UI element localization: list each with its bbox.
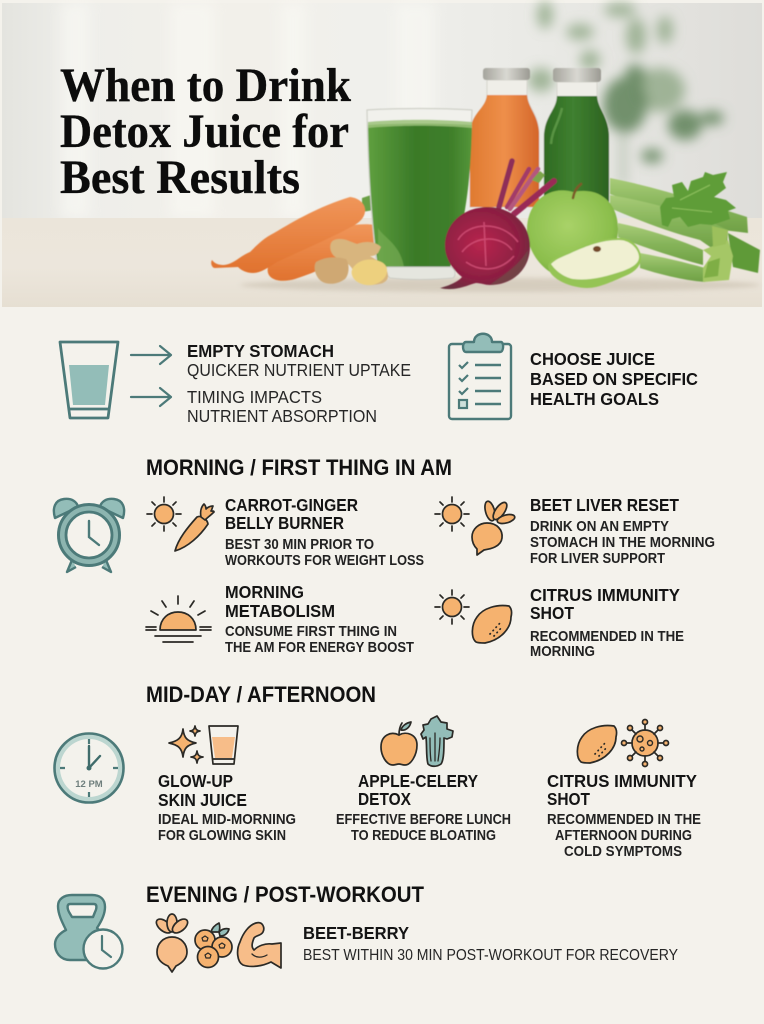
hero title: Best Results — [60, 151, 300, 204]
heading: mid-day: MID-DAY / AFTERNOON — [146, 682, 376, 707]
text: citrus immunity morning: RECOMMENDED IN THE — [530, 629, 684, 645]
text: citrus immunity afternoon: COLD SYMPTOMS — [564, 844, 682, 860]
text: beet liver reset: DRINK ON AN EMPTY — [530, 519, 669, 535]
text: apple-celery detox: TO REDUCE BLOATING — [351, 828, 496, 844]
text: glow-up: SKIN JUICE — [158, 790, 247, 810]
beet stems — [499, 161, 554, 214]
arrow: empty stomach — [131, 346, 171, 364]
text: carrot-ginger: BELLY BURNER — [225, 513, 344, 533]
text: apple-celery detox: DETOX — [358, 789, 411, 809]
text: apple-celery detox: EFFECTIVE BEFORE LUNCH — [336, 812, 511, 828]
goal text — [530, 349, 698, 409]
icon: sun and lemon — [435, 590, 512, 643]
text: apple-celery detox: APPLE-CELERY — [358, 771, 478, 791]
hero title: Detox Juice for — [60, 105, 349, 158]
goal text: BASED ON SPECIFIC — [530, 369, 698, 389]
celery bunch — [610, 172, 760, 282]
glass icon — [60, 342, 118, 418]
goal text: CHOOSE JUICE — [530, 349, 655, 369]
icon: lemon and virus — [577, 720, 668, 766]
icon: 12 pm clock — [54, 734, 124, 802]
text: beet-berry — [303, 923, 678, 964]
text: citrus immunity afternoon: RECOMMENDED IN THE — [547, 812, 701, 828]
intro text: NUTRIENT ABSORPTION — [187, 406, 377, 426]
text: morning metabolism — [225, 582, 414, 656]
text: carrot-ginger: BEST 30 MIN PRIOR TO — [225, 537, 374, 553]
ginger — [315, 239, 388, 285]
text: glow-up: IDEAL MID-MORNING — [158, 812, 296, 828]
icon: clipboard — [449, 334, 511, 419]
intro text: EMPTY STOMACH — [187, 341, 334, 361]
text: citrus immunity afternoon: CITRUS IMMUNITY — [547, 771, 697, 791]
text: beet liver reset: BEET LIVER RESET — [530, 495, 679, 515]
carrots — [211, 197, 377, 281]
icon: sunset — [146, 596, 211, 642]
text: citrus immunity morning: SHOT — [530, 603, 574, 623]
text: carrot-ginger: CARROT-GINGER — [225, 495, 358, 515]
green apple — [527, 184, 618, 278]
beet — [440, 207, 530, 289]
icon: apple and celery — [381, 716, 453, 766]
text: glow-up: FOR GLOWING SKIN — [158, 828, 286, 844]
blurred plant — [528, 1, 724, 185]
heading: morning: MORNING / FIRST THING IN AM — [146, 455, 452, 480]
icon: sun and beet — [435, 497, 516, 555]
icon: 12 pm clock: 12 PM — [75, 779, 103, 790]
text: beet liver reset — [530, 495, 715, 567]
icon: berries — [195, 923, 232, 968]
text: beet liver reset: STOMACH IN THE MORNING — [530, 535, 715, 551]
glass of green juice — [367, 108, 472, 280]
text: citrus immunity morning: CITRUS IMMUNITY — [530, 585, 680, 605]
icon: kettlebell with clock — [55, 895, 122, 968]
icon: alarm clock — [54, 499, 124, 572]
apple slice — [548, 238, 641, 288]
intro text — [187, 341, 411, 426]
arrow: timing — [131, 388, 171, 406]
icon: flexed arm — [238, 923, 281, 968]
text: citrus immunity afternoon: SHOT — [547, 789, 590, 809]
hero title — [60, 59, 351, 204]
orange bottle — [470, 68, 539, 207]
text: morning metabolism: CONSUME FIRST THING IN — [225, 624, 397, 640]
icon: sun and carrot — [147, 497, 214, 551]
text: beet liver reset: FOR LIVER SUPPORT — [530, 551, 665, 567]
text: citrus immunity afternoon — [547, 771, 701, 860]
goal text: HEALTH GOALS — [530, 389, 659, 409]
text: glow-up: GLOW-UP — [158, 771, 233, 791]
text: carrot-ginger: WORKOUTS FOR WEIGHT LOSS — [225, 553, 424, 569]
icon: sparkles and juice glass — [169, 726, 238, 764]
text: citrus immunity afternoon: AFTERNOON DURING — [555, 828, 692, 844]
icon: beet — [154, 914, 190, 972]
leaf behind glass — [362, 194, 374, 212]
text: morning metabolism: THE AM FOR ENERGY BOOST — [225, 640, 414, 656]
green bottle — [544, 68, 609, 204]
table — [2, 218, 762, 307]
text: morning metabolism: METABOLISM — [225, 601, 335, 621]
text: citrus immunity morning: MORNING — [530, 644, 595, 660]
text: glow-up — [158, 771, 296, 844]
text: apple-celery detox — [336, 771, 511, 844]
juice and produce — [211, 68, 760, 289]
intro text: TIMING IMPACTS — [187, 387, 322, 407]
text: beet-berry: BEST WITHIN 30 MIN POST-WORKOUT FOR RECOVERY — [303, 947, 678, 964]
heading: evening: EVENING / POST-WORKOUT — [146, 882, 425, 907]
text: carrot-ginger — [225, 495, 424, 569]
text: morning metabolism: MORNING — [225, 582, 304, 602]
text: citrus immunity morning — [530, 585, 684, 660]
intro text: QUICKER NUTRIENT UPTAKE — [187, 360, 411, 380]
hero photo — [2, 1, 762, 307]
text: beet-berry: BEET-BERRY — [303, 923, 409, 943]
hero title: When to Drink — [60, 59, 351, 112]
